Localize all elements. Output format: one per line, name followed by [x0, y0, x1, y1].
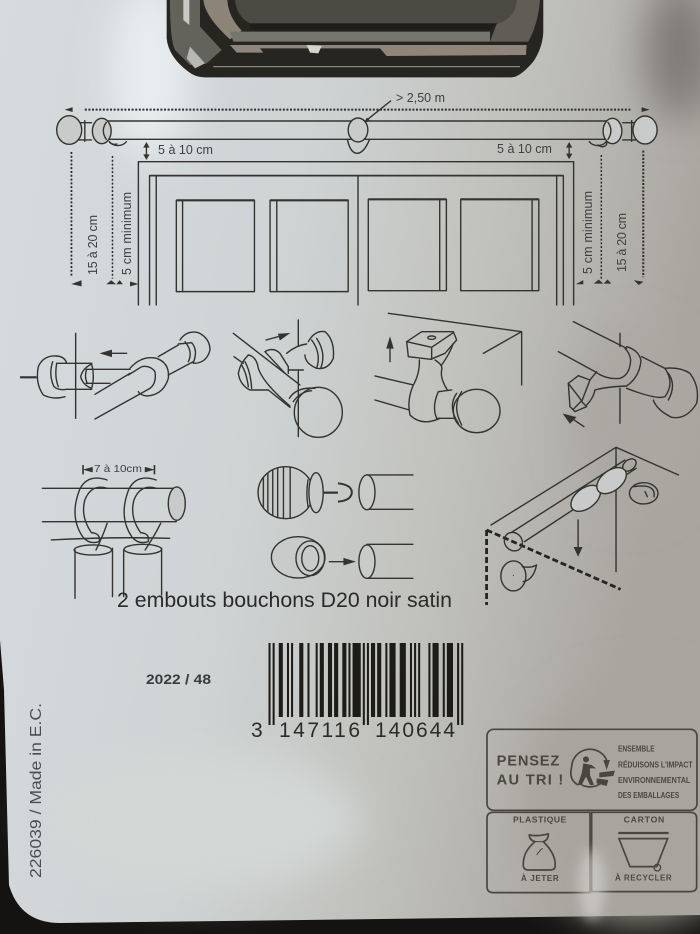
- box: plastique: PLASTIQUE: [513, 814, 567, 824]
- box: carton: CARTON: [624, 814, 664, 824]
- text: ensemble reduisons impact: [618, 745, 693, 800]
- diagram: window and rod dimensions: [57, 101, 657, 305]
- text: ensemble reduisons impact: DES EMBALLAGES: [618, 791, 680, 800]
- label: left 5 to 10 cm: 5 à 10 cm: [158, 142, 213, 157]
- leader arrow to center bracket: [364, 101, 391, 123]
- recycling info panel: [487, 729, 697, 893]
- window pane 4: [461, 199, 539, 291]
- barcode: [251, 643, 463, 742]
- date code: 2022 / 48: [146, 672, 212, 687]
- box: pensez au tri: AU TRI !: [497, 773, 563, 789]
- text: ensemble reduisons impact: ENSEMBLE: [618, 745, 655, 754]
- dimension: overall length dotted line: [66, 108, 649, 112]
- icon: triman recycling: [571, 749, 615, 787]
- barcode bars: [268, 643, 463, 725]
- corner installation diagram: [487, 447, 679, 605]
- reference text: 226039 / Made in E.C.: [28, 703, 45, 878]
- window pane 2: [270, 200, 348, 292]
- box: plastique: [487, 812, 590, 893]
- step 1: fix wall bracket: [20, 332, 210, 419]
- box: carton: À RECYCLER: [615, 873, 672, 882]
- label: greater than 2.50 m: > 2,50 m: [396, 90, 445, 105]
- label: left 5 cm minimum: 5 cm minimum: [120, 192, 134, 275]
- icon: recycling bin: [618, 833, 669, 871]
- ball end cap into tube: [271, 537, 413, 578]
- box: pensez au tri: PENSEZ: [497, 753, 559, 769]
- window pane 3: [368, 199, 446, 291]
- window frame: [138, 162, 574, 305]
- barcode digits: 147116: [279, 719, 360, 742]
- box: pensez au tri: [487, 729, 697, 810]
- curtain rings on rod: [42, 478, 185, 598]
- text: ensemble reduisons impact: ENVIRONNEMENTAL: [618, 776, 690, 785]
- barcode digits: [251, 719, 455, 742]
- dimension arrows: ring spacing: [83, 465, 154, 474]
- barcode digits: 3: [251, 719, 263, 742]
- dimension: left vertical dotted lines: [71, 152, 137, 286]
- label: right 5 to 10 cm: 5 à 10 cm: [497, 141, 552, 156]
- label: 7 to 10 cm: 7 à 10cm: [94, 463, 142, 475]
- product caption: 2 embouts bouchons D20 noir satin: [117, 589, 452, 612]
- finial with screw: [258, 465, 413, 520]
- second row diagrams: [42, 447, 679, 605]
- label: right 5 cm minimum: 5 cm minimum: [581, 191, 595, 274]
- window pane 1: [176, 200, 254, 292]
- blister window: [167, 0, 543, 77]
- dimension arrow: left 5 to 10 cm: [144, 143, 149, 159]
- dimension: right vertical dotted lines: [577, 151, 643, 285]
- glare reflection near carton box: [579, 849, 605, 921]
- icon: trash bag: [523, 834, 555, 870]
- label: right 15 to 20 cm: 15 à 20 cm: [615, 213, 629, 272]
- step 2: slide rod into bracket: [233, 320, 342, 437]
- step 4: tighten bracket: [558, 322, 697, 427]
- box: carton: [592, 812, 697, 892]
- barcode digits: 140644: [375, 719, 455, 742]
- label: left 15 to 20 cm: 15 à 20 cm: [86, 215, 100, 275]
- dimension arrow: right 5 to 10 cm: [566, 143, 572, 159]
- curtain rod: [57, 116, 657, 153]
- box: plastique: À JETER: [521, 874, 559, 883]
- step 3: bracket with finial on ceiling: [375, 313, 522, 433]
